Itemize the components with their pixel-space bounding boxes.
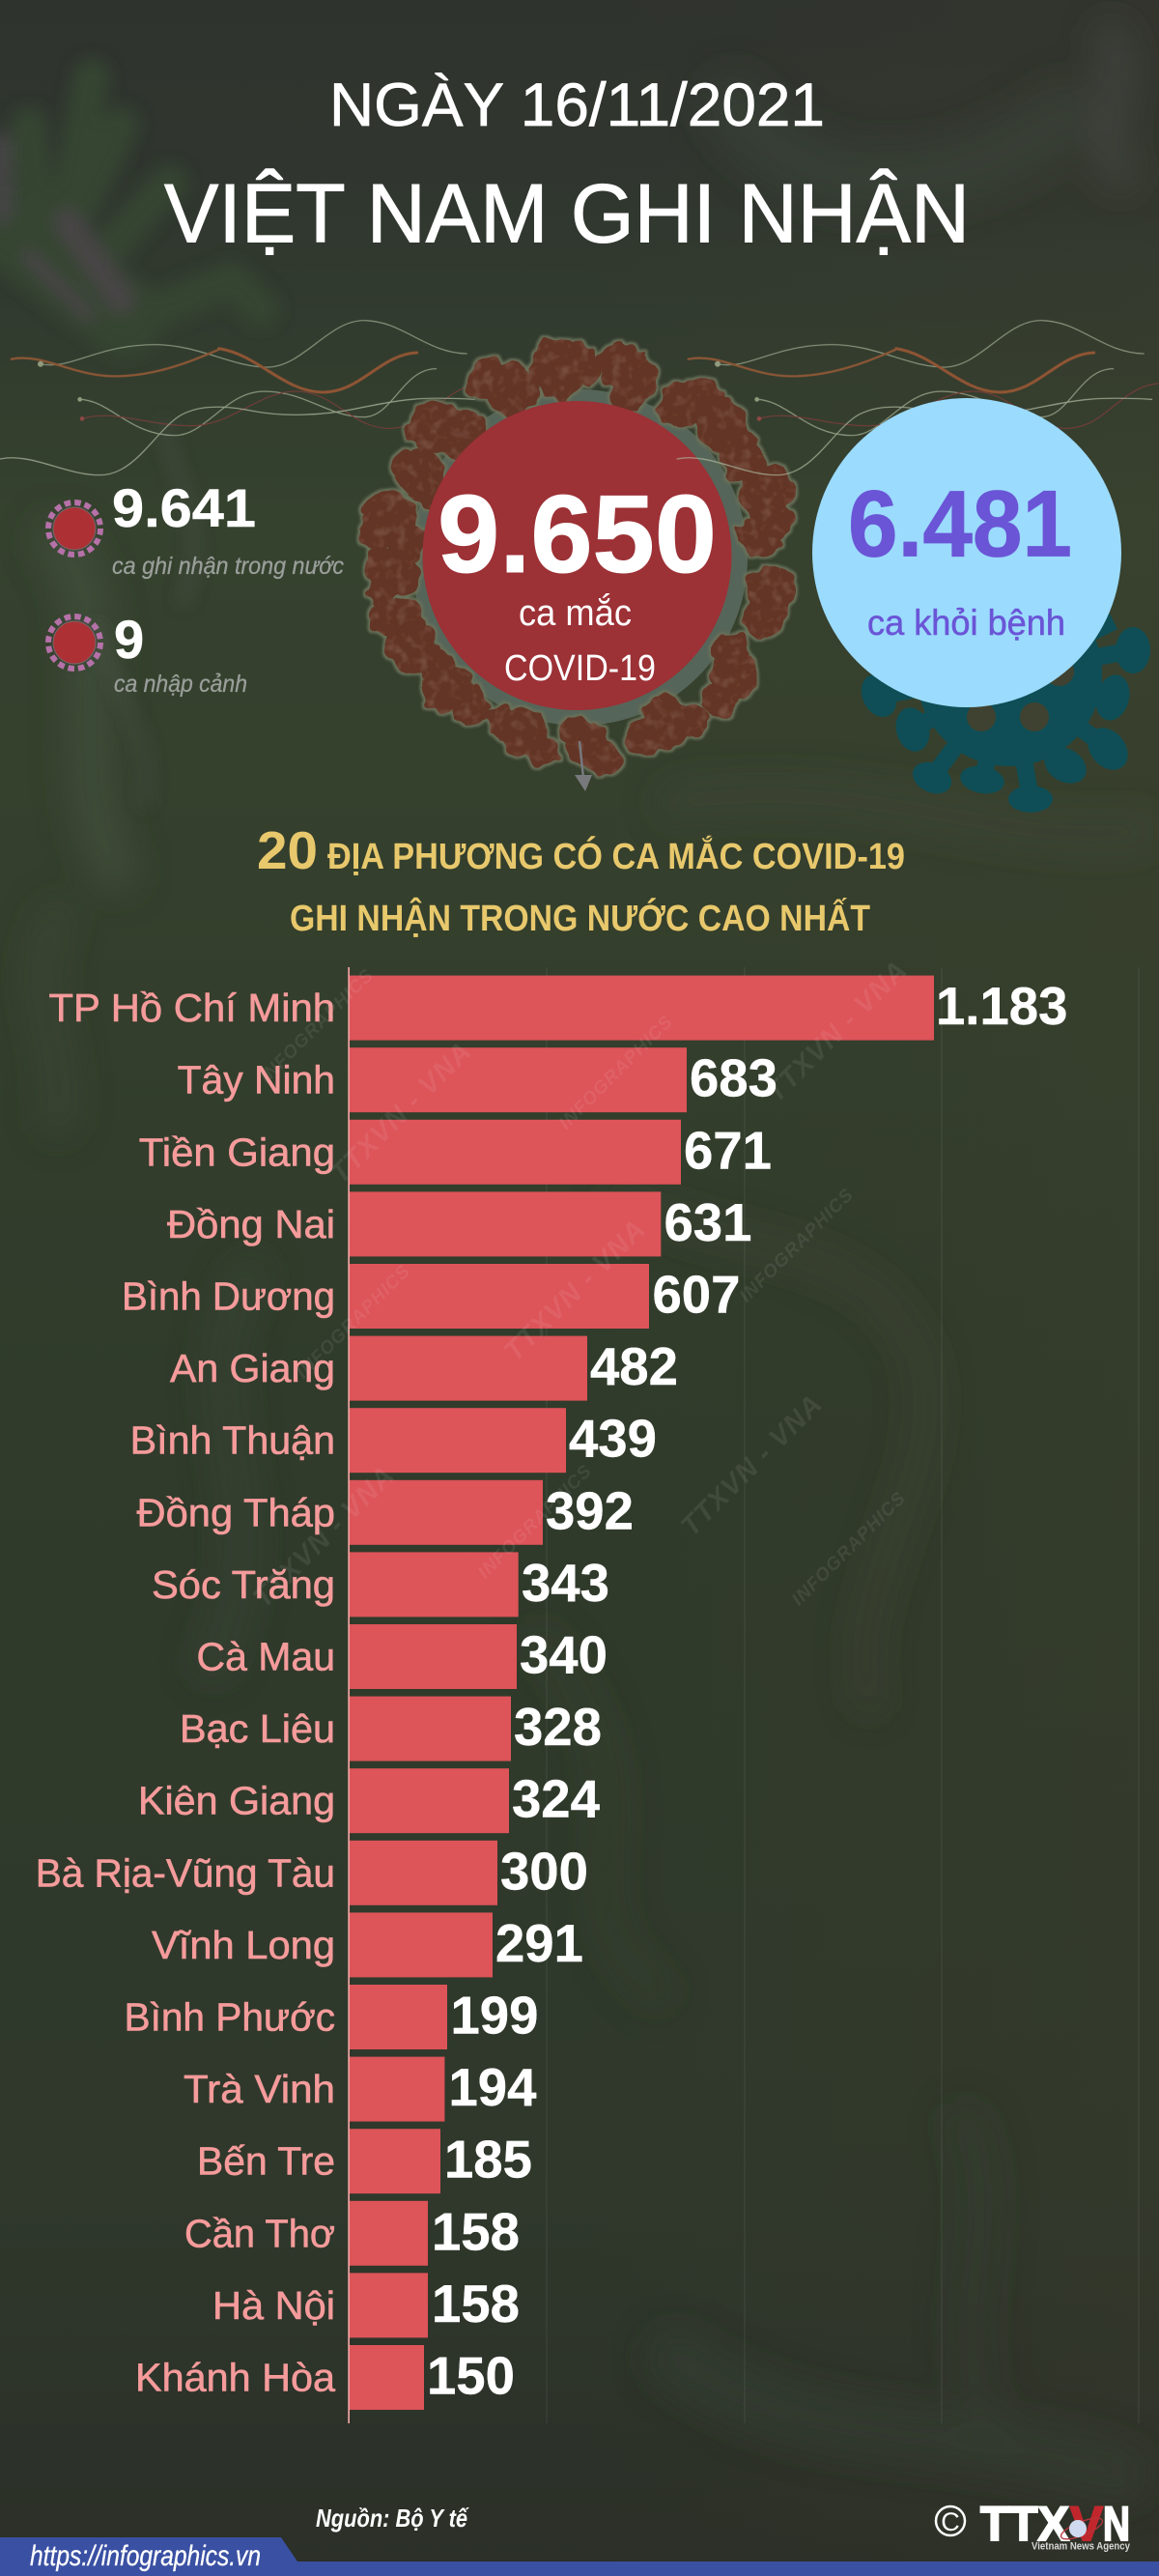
row: TP Hồ Chí Minh [48, 976, 1067, 1041]
row: Cà Mau: Cà Mau [197, 1635, 335, 1679]
row: Kiên Giang: 324 [512, 1770, 601, 1829]
row: Tây Ninh: 683 [690, 1049, 777, 1108]
logo: TTXVN [936, 2497, 1131, 2553]
row: Bạc Liêu: Bạc Liêu [180, 1706, 335, 1751]
agency tagline: Vietnam News Agency [1032, 2541, 1131, 2553]
watermarks: INFOGRAPHICS [736, 1185, 858, 1306]
row: An Giang: 482 [590, 1337, 678, 1396]
row: TP Hồ Chí Minh: TP Hồ Chí Minh [48, 986, 335, 1030]
row: Cần Thơ: 158 [432, 2202, 520, 2261]
chart heading [257, 820, 905, 939]
watermarks: TTXVN - VNA [675, 1388, 829, 1542]
row: Hà Nội: Hà Nội [212, 2283, 335, 2328]
row: Bình Phước: Bình Phước [124, 1994, 335, 2039]
row: Bà Rịa-Vũng Tàu: 300 [500, 1842, 588, 1901]
row: Sóc Trăng: Sóc Trăng [152, 1562, 335, 1607]
row: Bình Thuận: Bình Thuận [130, 1418, 335, 1463]
website link: https://infographics.vn [30, 2540, 261, 2572]
row: Bình Dương: 607 [653, 1266, 740, 1324]
agency wordmark [980, 2497, 1130, 2551]
row: Sóc Trăng [152, 1552, 609, 1617]
row: Bình Phước [124, 1985, 538, 2049]
chart heading: 20 [257, 820, 318, 880]
copyright mark [936, 2506, 965, 2536]
row: Bình Dương [122, 1264, 740, 1329]
arrow [575, 741, 592, 791]
row: Vĩnh Long: Vĩnh Long [152, 1923, 335, 1967]
total cases number: 9.650 [438, 473, 717, 596]
row: Bà Rịa-Vũng Tàu: Bà Rịa-Vũng Tàu [36, 1850, 335, 1895]
row: Tây Ninh: Tây Ninh [178, 1058, 335, 1102]
row: Khánh Hòa [135, 2345, 515, 2410]
row: Cà Mau: 340 [520, 1625, 608, 1685]
watermarks: TTXVN - VNA [325, 1036, 478, 1189]
row: An Giang: An Giang [170, 1346, 335, 1390]
row: Tiền Giang: 671 [684, 1121, 772, 1180]
bar chart [36, 976, 1067, 2410]
icon: small virus [48, 502, 100, 555]
row: Khánh Hòa: 150 [427, 2346, 515, 2406]
row: Bình Thuận: 439 [569, 1410, 657, 1469]
row: Tiền Giang: Tiền Giang [139, 1130, 335, 1174]
row: Bà Rịa-Vũng Tàu [36, 1841, 588, 1905]
domestic cases number: 9.641 [112, 477, 256, 538]
icon: coronavirus illustration [355, 339, 797, 776]
row: Đồng Nai [167, 1191, 751, 1256]
main heading: VIỆT NAM GHI NHẬN [164, 168, 970, 261]
icon: small virus [48, 616, 100, 669]
row: An Giang [170, 1336, 678, 1401]
row: Kiên Giang [138, 1768, 601, 1833]
row: Cà Mau [197, 1624, 608, 1689]
row: Đồng Tháp: 392 [546, 1481, 634, 1540]
row: Trà Vinh [184, 2057, 537, 2122]
panel: domestic cases [48, 477, 344, 580]
copyright mark: C [941, 2507, 960, 2536]
row: Đồng Nai: 631 [664, 1193, 751, 1252]
watermarks: INFOGRAPHICS [256, 965, 378, 1087]
panel: imported cases [48, 609, 247, 698]
row: Vĩnh Long: 291 [495, 1914, 583, 1973]
watermarks: TTXVN - VNA [760, 955, 914, 1108]
row: Đồng Tháp [137, 1480, 634, 1545]
row: Bạc Liêu: 328 [514, 1698, 602, 1757]
row: Hà Nội [212, 2273, 520, 2337]
row: Bình Thuận [130, 1408, 657, 1473]
row: Sóc Trăng: 343 [522, 1554, 609, 1613]
agency wordmark: TTX [980, 2497, 1069, 2551]
row: Kiên Giang: Kiên Giang [138, 1779, 335, 1823]
row: Bình Dương: Bình Dương [122, 1274, 335, 1318]
icon: teal virus [855, 581, 1150, 813]
title [164, 72, 970, 261]
panel: recovered circle [812, 398, 1121, 707]
row: Đồng Tháp: Đồng Tháp [137, 1490, 335, 1534]
panel: total cases circle [423, 401, 732, 710]
row: Bạc Liêu [180, 1697, 602, 1761]
imported cases label: ca nhập cảnh [114, 671, 247, 698]
date heading: NGÀY 16/11/2021 [329, 72, 825, 139]
wave lines left [0, 321, 483, 475]
chart heading: GHI NHẬN TRONG NƯỚC CAO NHẤT [290, 897, 870, 939]
row: Bến Tre: 185 [444, 2131, 532, 2190]
watermarks: TTXVN - VNA [247, 1460, 401, 1614]
total cases label: ca mắc [519, 592, 632, 634]
watermarks [247, 955, 914, 1614]
watermarks: TTXVN - VNA [498, 1214, 652, 1367]
watermarks: INFOGRAPHICS [474, 1461, 596, 1583]
watermarks: INFOGRAPHICS [788, 1488, 910, 1610]
footer band [0, 2537, 1159, 2576]
row: Khánh Hòa: Khánh Hòa [135, 2356, 335, 2400]
row: Cần Thơ: Cần Thơ [184, 2211, 335, 2255]
domestic cases label: ca ghi nhận trong nước [112, 553, 344, 580]
globe [1059, 2514, 1105, 2543]
watermarks: INFOGRAPHICS [293, 1261, 414, 1383]
row: Tây Ninh [178, 1047, 777, 1112]
recovered label: ca khỏi bệnh [867, 603, 1065, 643]
row: Trà Vinh: 194 [448, 2058, 537, 2117]
agency wordmark: N [1103, 2497, 1130, 2551]
agency wordmark: V [1070, 2497, 1104, 2551]
watermarks: INFOGRAPHICS [555, 1012, 677, 1133]
row: Bến Tre: Bến Tre [197, 2139, 335, 2184]
row: Vĩnh Long [152, 1912, 583, 1977]
row: Bình Phước: 199 [450, 1987, 538, 2045]
row: Đồng Nai: Đồng Nai [167, 1202, 335, 1246]
wave lines right [677, 321, 1159, 475]
row: TP Hồ Chí Minh: 1.183 [936, 977, 1067, 1036]
chart heading: ĐỊA PHƯƠNG CÓ CA MẮC COVID-19 [327, 835, 905, 877]
recovered number: 6.481 [848, 472, 1072, 576]
row: Hà Nội: 158 [432, 2275, 520, 2333]
imported cases number: 9 [114, 609, 144, 670]
chart grid lines and axis [348, 967, 1139, 2423]
row: Bến Tre [197, 2129, 532, 2193]
source note: Nguồn: Bộ Y tế [316, 2504, 469, 2533]
row: Tiền Giang [139, 1120, 772, 1185]
row: Trà Vinh: Trà Vinh [184, 2067, 335, 2111]
disease label: COVID-19 [504, 648, 656, 689]
row: Cần Thơ [184, 2201, 520, 2266]
